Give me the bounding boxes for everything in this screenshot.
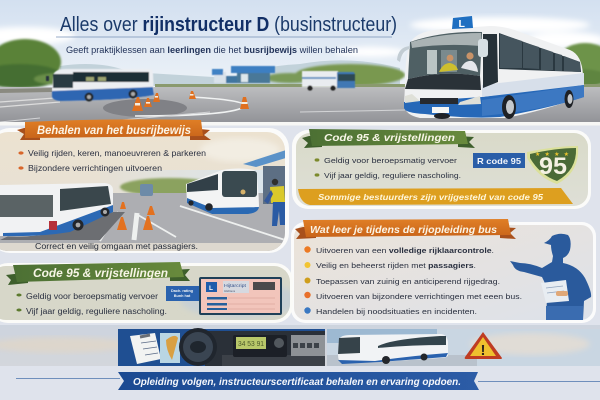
bullet list: behalen: Veilig rijden, keren, manoeuvreren & parkeren [28,148,206,158]
bullet list: wat leer je: Uitvoeren van een volledige rijklaarcontrole . [316,246,494,255]
hero scene [0,0,600,126]
icon: licence card [199,277,282,315]
heading ribbon: behalen: Behalen van het busrijbewijs [37,125,191,137]
mirrors [397,46,410,62]
icon: warning triangle [465,332,502,359]
panel: code 95 rechts [292,130,591,209]
people [447,55,453,61]
icon: 95 shield: 95 [539,153,567,180]
bullet list: behalen: Bijzondere verrichtingen uitvoeren [28,163,162,173]
subtitle: Geeft praktijklessen aan leerlingen die het busrijbewijs willen behalen [66,45,358,56]
icon: warning triangle: ! [480,342,486,359]
badge: blue tag: Bunh hat [174,294,191,298]
icon: side bus [327,329,600,366]
heading ribbon: code 95 links [6,262,190,285]
bullet list: wat leer je: Handelen bij noodsituaties en incidenten. [316,307,477,316]
bullet list: code 95 rechts [315,156,461,180]
far bus [140,184,153,196]
icon: clipboard [130,333,180,364]
bullet list: wat leer je: Veilig en beheerst rijden met passagiers . [316,261,476,270]
icon: dashboard [118,328,325,366]
icon: 95 shield [527,146,578,184]
bullet list: code 95 rechts: Vijf jaar geldig, reguliere nascholing. [324,171,461,180]
building [212,66,275,83]
heading ribbon: behalen [17,119,211,140]
cones [117,202,155,230]
bullet list: wat leer je: Toepassen van zuinig en anticiperend rijgedrag. [316,277,500,286]
footer banner [118,372,479,390]
icon: licence card: Hijtarcript [224,283,247,288]
bullet list: wat leer je: Uitvoeren van bijzondere verrichtingen met eeen bus. [316,292,522,301]
traffic cones [132,91,249,111]
icon: instructor in vest [264,179,285,226]
panel: behalen van het busrijbewijs [0,128,290,253]
icon: licence card: L [209,285,213,292]
icon: 95 shield: ★★★★ [535,151,569,158]
panel: code 95 links [0,263,300,323]
bullet list: code 95 rechts: Geldig voor beroepsmatig vervoer [324,156,458,165]
icon: left bus [46,69,154,102]
icon: bus front [186,168,259,214]
badge: blue tag: Dach. rating [171,289,194,293]
building in scene [243,150,286,167]
bullet list: code 95 links: Geldig voor beroepsmatig vervoer [26,292,158,301]
icon: L sign [452,16,473,30]
callout: code 95 strip: Sommige bestuurders zijn vrijgesteld van code 95 [318,192,543,202]
icon: dashboard: 34 53 91 [238,339,264,348]
heading ribbon: code 95 rechts: Code 95 & vrijstellingen [324,132,455,144]
badge: code 95 label [473,153,525,168]
heading ribbon: code 95 rechts [302,129,475,148]
callout: code 95 strip [298,188,573,205]
icon: bus rear [0,183,113,236]
bullet list: behalen [18,148,206,173]
title: Alles over rijinstructeur D (businstructeur) [60,13,397,36]
icon: truck [302,71,355,91]
bottom image strip [0,325,600,366]
icon: L sign: L [458,18,466,30]
bullet list: code 95 links: Vijf jaar geldig, reguliere nascholing. [26,307,167,316]
footer line left [16,378,120,380]
icon: instructor pointing [510,234,591,320]
icon: main bus with learner sign [397,16,584,119]
heading ribbon: wat leer je [295,219,516,239]
footer banner: Opleiding volgen, instructeurscertificaat behalen en ervaring opdoen. [133,376,461,388]
badge: blue tag [166,286,199,301]
badge: code 95 label: R code 95 [477,156,521,166]
heading ribbon: wat leer je: Wat leer je tijdens de rijopleiding bus [310,225,497,236]
heading ribbon: code 95 links: Code 95 & vrijstellingen [33,268,168,280]
icon: licence card: Inlichtens [224,289,235,293]
front [405,94,420,103]
caption: passagiers: Correct en veilig omgaan met passagiers. [35,241,198,251]
bullet list: code 95 links [16,292,167,316]
panel: wat leer je [291,222,596,323]
tachograph display [233,335,287,357]
steering wheel [179,328,217,366]
bullet list: wat leer je [304,246,522,316]
